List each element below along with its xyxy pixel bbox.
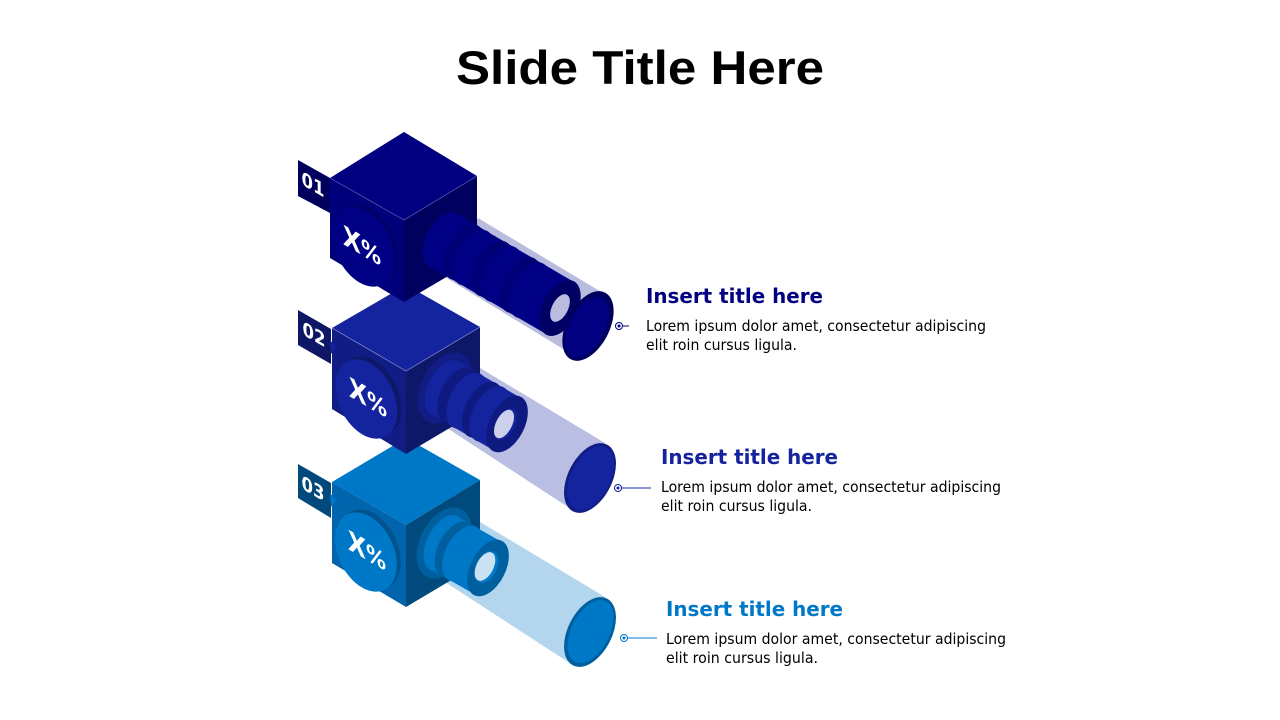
title: Slide Title Here — [456, 41, 824, 94]
ribbed tube 02 — [418, 352, 528, 452]
percentage disc 02: X% — [349, 372, 387, 425]
panel: item 03 graphic — [298, 438, 627, 675]
body text 03: Lorem ipsum dolor amet, consectetur adipiscing — [666, 630, 1006, 648]
number tag 01: 01 — [302, 167, 324, 203]
number tag 03: 03 — [302, 471, 324, 507]
cube 02 — [330, 285, 480, 454]
percentage disc 02 — [323, 346, 414, 449]
tube end cap 02 — [553, 435, 627, 521]
percentage disc 01: X% — [343, 220, 381, 273]
percentage disc 01 — [320, 194, 411, 297]
number tag 02 — [298, 310, 331, 364]
number tag 03 — [298, 464, 331, 518]
panel: item 02 graphic — [298, 285, 627, 521]
heading 02: Insert title here — [661, 445, 838, 469]
panel: item 01 graphic — [298, 132, 624, 369]
translucent tube 02 — [447, 368, 605, 507]
body text 03: elit roin cursus ligula. — [666, 649, 818, 667]
heading 01: Insert title here — [646, 284, 823, 308]
callout 03 — [620, 597, 1011, 667]
body text 02: Lorem ipsum dolor amet, consectetur adipiscing — [661, 478, 1001, 496]
heading 03: Insert title here — [666, 597, 843, 621]
number tag 02: 02 — [303, 317, 325, 353]
ribbed tube 01 — [414, 206, 589, 343]
connector 03 — [620, 634, 657, 642]
body text 01: elit roin cursus ligula. — [646, 336, 797, 354]
tube end cap 01 — [552, 283, 624, 369]
callout 01 — [616, 284, 991, 354]
body text 01: Lorem ipsum dolor amet, consectetur adipiscing — [646, 317, 986, 335]
connector 01 — [616, 322, 629, 330]
translucent tube 01 — [445, 218, 603, 352]
connector 02 — [614, 484, 651, 492]
tube end cap 03 — [553, 589, 627, 675]
body text 02: elit roin cursus ligula. — [661, 497, 812, 515]
percentage disc 03 — [323, 499, 413, 602]
translucent tube 03 — [445, 522, 605, 662]
number tag 01 — [298, 160, 330, 213]
cube 03 — [330, 438, 480, 607]
callout 02 — [614, 445, 1006, 515]
percentage disc 03: X% — [348, 525, 386, 578]
ribbed tube 03 — [416, 508, 509, 596]
cube 01 — [329, 132, 477, 302]
